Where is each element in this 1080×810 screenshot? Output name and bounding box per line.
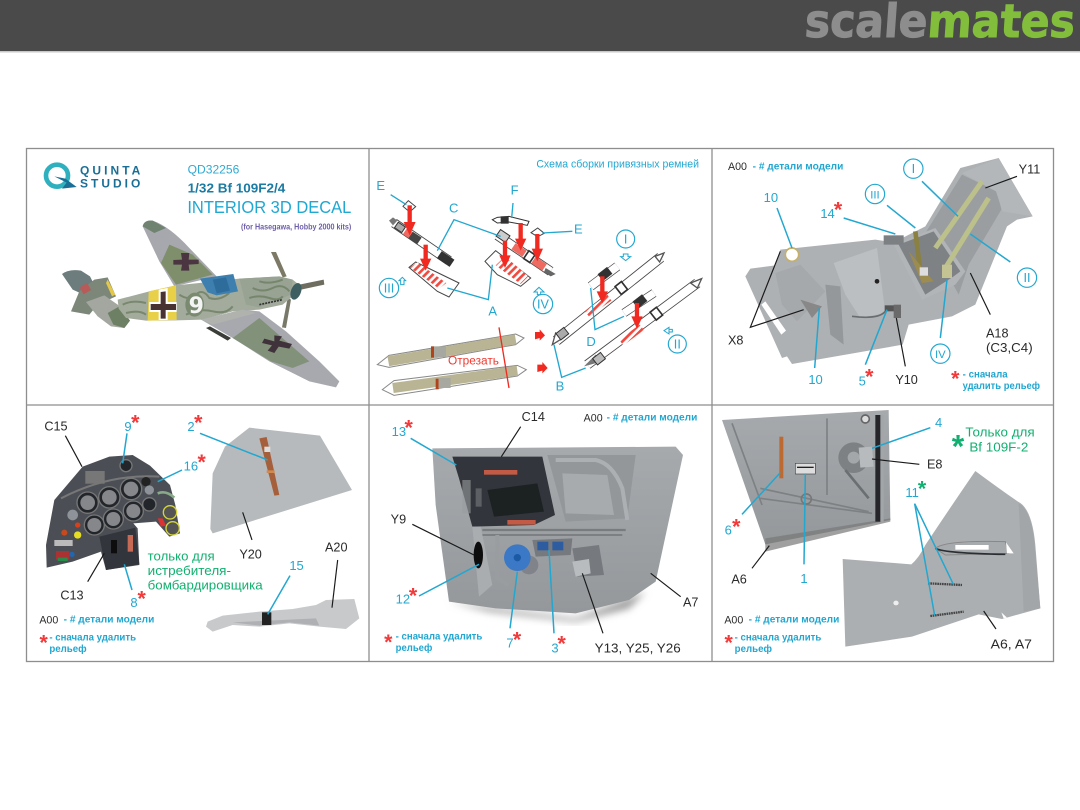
belt markers: III [870,189,880,201]
part numbers: 6 [725,522,732,537]
product title: INTERIOR 3D DECAL [187,197,351,217]
part numbers: 13 [392,424,406,439]
cyan leader lines [777,181,1010,368]
note: remove relief: - сначала [963,369,1008,380]
panel: title and aircraft [46,163,352,387]
cyan leader lines [411,438,554,633]
belt markers: III [384,281,394,295]
legend: - сначала удалить [735,632,821,643]
part letters: E [574,221,583,236]
part letters: A [488,304,497,319]
red asterisks: * [732,514,741,538]
note: remove relief [963,369,1040,392]
control column A20 [206,599,359,632]
red asterisks: * [131,410,140,434]
part labels: (C3,C4) [986,341,1033,355]
legend [724,614,839,655]
belt markers: IV [537,297,550,311]
red asterisks [725,514,741,654]
part numbers: 15 [289,558,304,573]
green note: только для [148,548,215,563]
part numbers: 10 [764,190,778,205]
part letters [376,178,596,394]
red assembly arrows [404,205,643,373]
part letters: D [586,334,596,349]
red asterisks: * [558,632,567,656]
part labels [391,410,698,656]
black leader lines [752,459,996,629]
part numbers [124,419,304,610]
kit note: (for Hasegawa, Hobby 2000 kits) [241,223,352,232]
cyan leader lines [123,433,290,614]
red asterisks: * [384,630,393,654]
red cut line [499,327,509,388]
part labels: A20 [325,541,348,555]
belt markers: I [912,162,915,176]
part labels: C15 [44,419,68,433]
logo text [80,163,141,190]
part numbers: 14 [820,206,835,221]
red asterisks: * [40,630,49,654]
aircraft illustration [62,221,339,387]
part labels: A18 [986,326,1009,340]
belt markers: I [624,232,627,246]
red asterisks: * [138,587,147,611]
legend: part number: A00 [728,161,747,173]
note: remove relief [396,631,482,654]
drawing: uncut khaki belts [377,334,526,395]
part labels: A6 [731,572,747,586]
fuselage wall illustration [722,410,890,552]
part labels: Y13, Y25, Y26 [595,642,681,656]
part numbers: 16 [184,459,198,474]
part labels: X8 [728,334,743,348]
part labels: C14 [522,410,545,424]
part numbers: 1 [800,571,808,586]
panel grid frame [26,148,1054,662]
instrument panel illustration [46,455,180,570]
black leader lines [750,176,1017,366]
red asterisks: * [405,416,414,440]
red asterisks [384,416,567,656]
note: remove relief: удалить рельеф [963,380,1040,392]
green asterisks: * [952,429,965,465]
seat pad Y20 [210,428,352,533]
part labels: Y20 [239,547,262,561]
part labels [44,419,348,602]
cut label: Отрезать [448,354,499,368]
black leader lines [412,427,681,633]
red asterisks: * [834,197,843,221]
panel: side wall [384,410,698,656]
cyan leader lines [742,428,953,616]
red asterisks: * [951,367,960,391]
panel: instrument panel [39,410,359,655]
belt markers [865,159,1037,363]
part letters: E [376,178,385,193]
legend: part number: - # детали модели [753,161,843,172]
icon: Quinta Studio logo [46,165,77,189]
red asterisks [40,410,207,654]
product code: QD32256 [188,163,239,176]
tail illustration [843,471,1040,647]
heading: belt scheme: Схема сборки привязных ремней [536,158,699,170]
legend: рельеф [49,643,87,655]
part numbers: 11 [905,485,919,500]
part numbers: 12 [396,591,410,606]
red asterisks [834,197,960,391]
logo text: STUDIO [80,176,140,190]
part numbers: 7 [506,636,514,651]
part numbers [392,424,559,656]
part labels: C13 [60,588,84,602]
part numbers: 4 [935,415,942,430]
red asterisks: * [409,584,418,608]
legend: part number: A00 [584,413,603,425]
legend: - сначала удалить [49,632,136,643]
belt markers: II [674,337,681,351]
belt markers: IV [935,349,946,361]
part labels: A6, A7 [991,637,1032,651]
green note: Bf 109F-2 [969,440,1028,455]
legend: рельеф [735,643,772,655]
part labels: A7 [683,596,698,610]
drawing: belts I and II [552,253,702,366]
green note [965,425,1035,455]
panel: belt assembly scheme [376,158,702,395]
logo text: QUINTA [80,163,141,177]
green asterisks: * [918,477,927,501]
side wall illustration [432,447,683,622]
legend: - # детали модели [64,615,154,626]
part labels: E8 [927,457,942,471]
seat illustration [745,158,1033,364]
green note: бомбардировщика [148,578,263,593]
red asterisks: * [198,450,207,474]
red asterisks: * [725,630,734,654]
leader lines [391,195,624,377]
red asterisks: * [865,365,874,389]
part labels: Y9 [391,513,406,527]
header bar [0,0,1080,52]
part numbers [764,190,866,388]
part labels: Y11 [1019,163,1040,177]
green note [148,548,263,593]
black leader lines [65,436,338,608]
part labels [728,163,1040,387]
model name: 1/32 Bf 109F2/4 [188,181,285,195]
panel: wall and tail [722,410,1040,655]
part numbers: 8 [130,595,138,610]
part labels: Y10 [895,373,918,387]
part letters: B [556,379,564,394]
belt markers: II [1023,271,1031,285]
note: remove relief: рельеф [396,642,432,654]
drawing: belts III and IV [389,201,556,297]
part numbers: 2 [187,419,195,434]
part labels [731,457,1032,651]
green asterisks [918,429,965,501]
green note: истребителя- [148,563,231,578]
legend [39,614,154,655]
part numbers: 3 [551,641,559,656]
green note: Только для [965,425,1035,440]
part letters: F [511,183,519,198]
legend: A00 [39,614,58,626]
aircraft illustration: 9 [189,294,204,319]
belt markers [379,230,686,353]
part numbers: 5 [859,373,866,388]
red asterisks: * [194,410,203,434]
legend: A00 [724,614,743,626]
panel: seat [728,158,1040,392]
red asterisks: * [513,628,522,652]
part numbers: 10 [808,372,823,387]
part numbers [725,415,942,586]
note: remove relief: - сначала удалить [396,631,482,642]
legend: part number: - # детали модели [607,413,697,424]
part letters: C [449,201,458,216]
part numbers: 9 [124,419,132,434]
legend: - # детали модели [749,615,839,626]
